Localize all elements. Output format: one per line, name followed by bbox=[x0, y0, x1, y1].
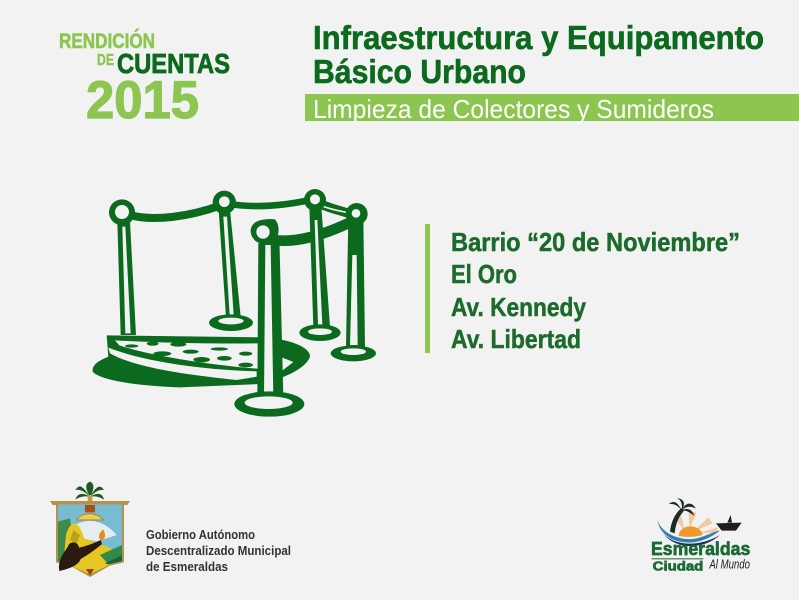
locations list bbox=[451, 227, 740, 354]
logo: Esmeraldas Ciudad Al Mundo: Al Mundo bbox=[709, 557, 750, 571]
boat bbox=[716, 523, 742, 531]
palm tree bbox=[669, 498, 696, 533]
heading: Infraestructura y Equipamento Básico Urbano: Infraestructura y Equipamento bbox=[313, 19, 764, 56]
front post bbox=[257, 237, 283, 397]
list divider bbox=[425, 224, 430, 353]
shield bbox=[50, 501, 130, 577]
logo: Rendición de Cuentas 2015 bbox=[59, 29, 230, 130]
locations list: Av. Libertad bbox=[451, 324, 581, 354]
locations list: El Oro bbox=[451, 259, 517, 289]
post 1 bbox=[117, 222, 136, 335]
institution name bbox=[146, 527, 291, 574]
post 4 bbox=[346, 217, 365, 347]
sun bbox=[679, 526, 703, 537]
post 3 bbox=[309, 207, 330, 327]
logo: Rendición de Cuentas 2015: RENDICIÓN bbox=[59, 29, 155, 53]
palm crest bbox=[75, 482, 104, 500]
logo: Esmeraldas Ciudad Al Mundo: Ciudad bbox=[653, 559, 703, 573]
icon: coat of arms of Esmeraldas bbox=[50, 482, 130, 577]
subtitle banner: Limpieza de Colectores y Sumideros bbox=[313, 94, 714, 124]
heading: Infraestructura y Equipamento Básico Urbano: Básico Urbano bbox=[313, 53, 526, 90]
back ropes bbox=[130, 200, 353, 241]
logo: Rendición de Cuentas 2015: 2015 bbox=[86, 71, 199, 130]
locations list: Av. Kennedy bbox=[451, 292, 586, 322]
post 2 bbox=[219, 210, 241, 317]
sun rays bbox=[673, 511, 718, 533]
institution name: de Esmeraldas bbox=[146, 559, 228, 574]
institution name: Descentralizado Municipal bbox=[146, 543, 291, 558]
manhole pit and lid bbox=[93, 335, 310, 387]
heading: Infraestructura y Equipamento Básico Urbano bbox=[313, 19, 764, 90]
locations list: Barrio “20 de Noviembre” bbox=[451, 227, 740, 257]
icon: manhole with safety barrier bbox=[93, 189, 376, 417]
wordmark: Esmeraldas bbox=[651, 538, 750, 559]
logo: Esmeraldas Ciudad Al Mundo bbox=[651, 498, 750, 573]
raised figure with torch bbox=[59, 540, 102, 571]
lid holes bbox=[125, 344, 138, 348]
logo: Rendición de Cuentas 2015: CUENTAS bbox=[117, 48, 230, 79]
institution name: Gobierno Autónomo bbox=[146, 527, 255, 542]
logo: Rendición de Cuentas 2015: DE bbox=[97, 52, 114, 69]
waves bbox=[657, 520, 720, 543]
